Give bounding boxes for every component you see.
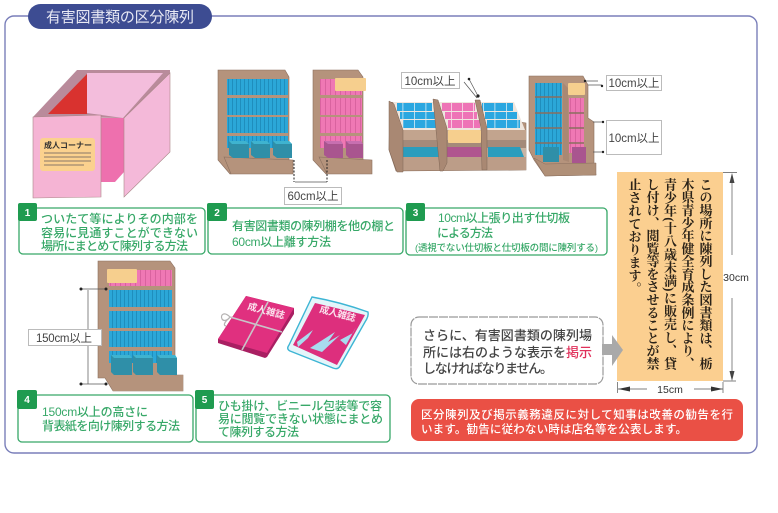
label 4: 150cm以上の高さに: [42, 404, 148, 419]
label 2: [207, 203, 403, 254]
label 2: 2: [214, 208, 220, 219]
sign: notice: この場所に陳列した図書類は、栃: [698, 178, 712, 371]
sign: adult corner: 成人コーナー: [44, 140, 92, 150]
label 5: [195, 390, 390, 442]
label 4: 背表紙を向け陳列する方法: [42, 418, 180, 433]
sign: notice: 青少年(十八歳未満)に販売し、貸: [662, 177, 677, 371]
callout: display requirement: 所には右のような表示を掲示: [423, 345, 592, 360]
label 5: て陳列する方法: [218, 424, 299, 439]
illustration: tied magazines: [218, 296, 294, 358]
label 5: ひも掛け、ビニール包装等で容: [218, 398, 382, 413]
blue books left: [397, 103, 439, 128]
blue books right: [482, 103, 520, 128]
illustration: pink shelf: [313, 70, 372, 174]
label 1: 容易に見通すことができない: [41, 225, 198, 240]
warning banner: います。勧告に従わない時は店名等を公表します。: [421, 422, 687, 436]
dimension: 15cm: [618, 382, 723, 396]
label 1: 1: [25, 208, 31, 219]
dimension: 15cm: 15cm: [657, 384, 683, 396]
dimension: 10cm side lower: [593, 120, 662, 154]
dimension: 10cm partition: 10cm以上: [404, 75, 456, 88]
illustration: tall shelf with back covers: [98, 261, 183, 391]
title pill: 有害図書類の区分陳列: [46, 9, 194, 26]
warning banner: 区分陳列及び掲示義務違反に対して知事は改善の勧告を行: [421, 408, 734, 422]
dimension: 10cm side top: [584, 76, 662, 90]
dimension: 150cm: [28, 288, 108, 386]
dimension: 10cm side top: 10cm以上: [608, 77, 660, 90]
dimension: 30cm: [723, 172, 749, 381]
dimension: 30cm: 30cm: [723, 272, 749, 284]
label 5: 易に閲覧できない状態にまとめ: [218, 411, 383, 426]
sign: notice: 木県青少年健全育成条例により、: [680, 177, 694, 370]
arrow to sign: [602, 335, 623, 366]
label 5: 5: [202, 395, 208, 406]
illustration: vinyl-wrapped magazine: 成人雑誌: [318, 303, 358, 325]
label 3: 3: [413, 208, 419, 219]
illustration: partition booth: [33, 70, 170, 198]
sign: notice: 止されております。: [626, 178, 642, 295]
callout: display requirement: さらに、有害図書類の陳列場: [423, 328, 592, 343]
warning banner: [411, 399, 743, 441]
illustration: partitioned display stand: [389, 99, 526, 172]
dimension: 60cm: 60cm以上: [287, 190, 339, 203]
label 1: [18, 203, 205, 254]
label 1: 場所にまとめて陳列する方法: [41, 238, 188, 253]
pink books: [442, 103, 480, 128]
label 2: 60cm以上離す方法: [232, 234, 331, 249]
sign: notice: し付け、閲覧等をさせることが禁: [644, 178, 660, 371]
callout: display requirement: [411, 317, 603, 384]
label 3: (透視でない仕切板と仕切板の間に陳列する): [415, 242, 598, 254]
callout: display requirement: しなければなりません。: [423, 361, 553, 376]
illustration: blue shelf: [218, 70, 293, 174]
dimension: 60cm: [284, 160, 342, 204]
label 1: ついたて等によりその内部を: [41, 211, 198, 226]
label 3: 10cm以上張り出す仕切板: [438, 211, 570, 225]
label 3: [406, 203, 607, 255]
label 2: 有害図書類の陳列棚を他の棚と: [232, 218, 395, 233]
illustration: vinyl-wrapped magazine: [288, 297, 368, 369]
label 4: 4: [24, 395, 30, 406]
dimension: 10cm partition: [402, 72, 480, 98]
dimension: 150cm: 150cm以上: [36, 332, 92, 345]
label 4: [17, 390, 193, 442]
illustration: tied magazines: 成人雑誌: [246, 300, 287, 322]
label 3: による方法: [437, 225, 493, 240]
illustration: side shelf with partition: [529, 76, 596, 176]
sign: notice: [617, 172, 723, 381]
dimension: 10cm side lower: 10cm以上: [608, 132, 660, 145]
title pill: [28, 4, 212, 29]
